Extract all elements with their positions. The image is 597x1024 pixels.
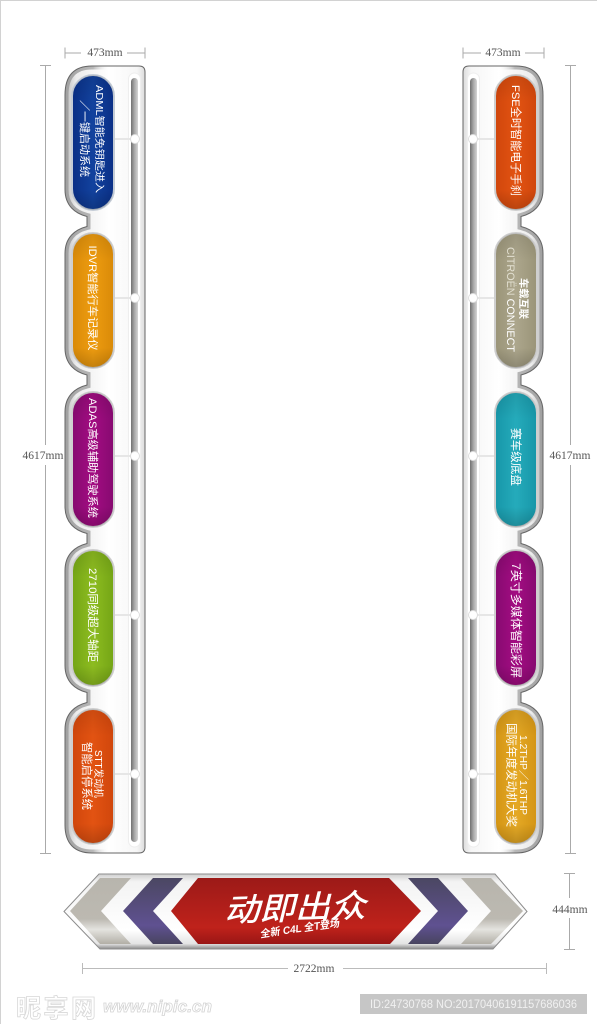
pill: racing chassis: 赛车级底盘 [509, 428, 523, 486]
panel outline [65, 66, 145, 853]
slot knobs [114, 134, 140, 778]
pill: STT engine: STT发动机 [92, 750, 105, 798]
pill: engine award: 1.2THP／1.6THP [517, 735, 529, 815]
watermark: image id: ID:24730768 NO:20170406191157686036 [370, 999, 577, 1011]
dimension: right panel height [550, 66, 590, 854]
watermark: site name: www.nipic.cn [103, 997, 212, 1016]
pill: ADAS driving assistance: ADAS高级辅助驾驶系统 [86, 398, 100, 518]
dimension: left panel width [65, 47, 145, 59]
pill: ADML keyless entry: ADML智能免钥匙进入 [93, 85, 106, 193]
pill: IDVR recorder: IDVR智能行车记录仪 [86, 245, 100, 351]
dimension: banner width: 2722mm [294, 963, 334, 975]
panel: right feature strip [463, 66, 543, 853]
banner frame [64, 874, 527, 949]
panel: left feature strip [65, 66, 145, 853]
right gray chevron [461, 878, 523, 944]
logo subline: 全新 C4L 全T登场 [260, 916, 340, 941]
left gray chevron [70, 878, 131, 944]
pill: FSE electronic handbrake: FSE全时智能电子手刹 [509, 85, 523, 196]
pill: 7-inch screen: 7英寸多媒体智能彩屏 [509, 563, 524, 678]
pill: FSE electronic handbrake [495, 75, 537, 210]
pill: engine award: 国际年度发动机大奖 [504, 723, 518, 828]
pill: IDVR recorder [72, 233, 114, 368]
dimension: left panel height [23, 66, 63, 854]
dimension: banner height [552, 874, 588, 950]
watermark: site name: 昵享网 [16, 995, 96, 1023]
pill: ADML keyless entry: ／一键启动系统 [78, 100, 92, 177]
banner: arrow sign [64, 874, 527, 949]
slot rail [128, 73, 140, 847]
pill: Citroen Connect: 车载互联 [517, 278, 530, 319]
dimension: banner width [82, 963, 547, 975]
dimension: right panel width: 473mm [485, 47, 521, 59]
pill: STT engine: 智能启停系统 [80, 742, 94, 810]
dimension: right panel width [463, 47, 544, 59]
dimension: left panel height: 4617mm [23, 450, 63, 462]
left navy chevron [123, 878, 183, 944]
watermark: site name [16, 995, 212, 1023]
pill: 2710 wheelbase [72, 550, 114, 686]
pill: engine award [495, 709, 537, 844]
red centre plate [171, 878, 421, 944]
pill: racing chassis [495, 392, 537, 527]
pill: ADAS driving assistance [72, 392, 114, 527]
pill: 2710 wheelbase: 2710同级超大轴距 [86, 568, 100, 662]
watermark: image id [360, 994, 587, 1014]
dimension: banner height: 444mm [552, 904, 588, 916]
slot knobs [468, 134, 494, 778]
logo slogan: 动即出众 [223, 887, 373, 928]
right navy chevron [408, 878, 468, 944]
dimension: left panel width: 473mm [87, 47, 123, 59]
dimension: right panel height: 4617mm [550, 450, 590, 462]
pill: Citroen Connect: CITROËN CONNECT [504, 247, 516, 352]
pill: Citroen Connect [495, 233, 537, 368]
panel outline [463, 66, 543, 853]
pill: ADML keyless entry [72, 75, 114, 210]
pill: 7-inch screen [495, 550, 537, 686]
pill: STT engine [72, 709, 114, 844]
slot rail [468, 73, 480, 847]
